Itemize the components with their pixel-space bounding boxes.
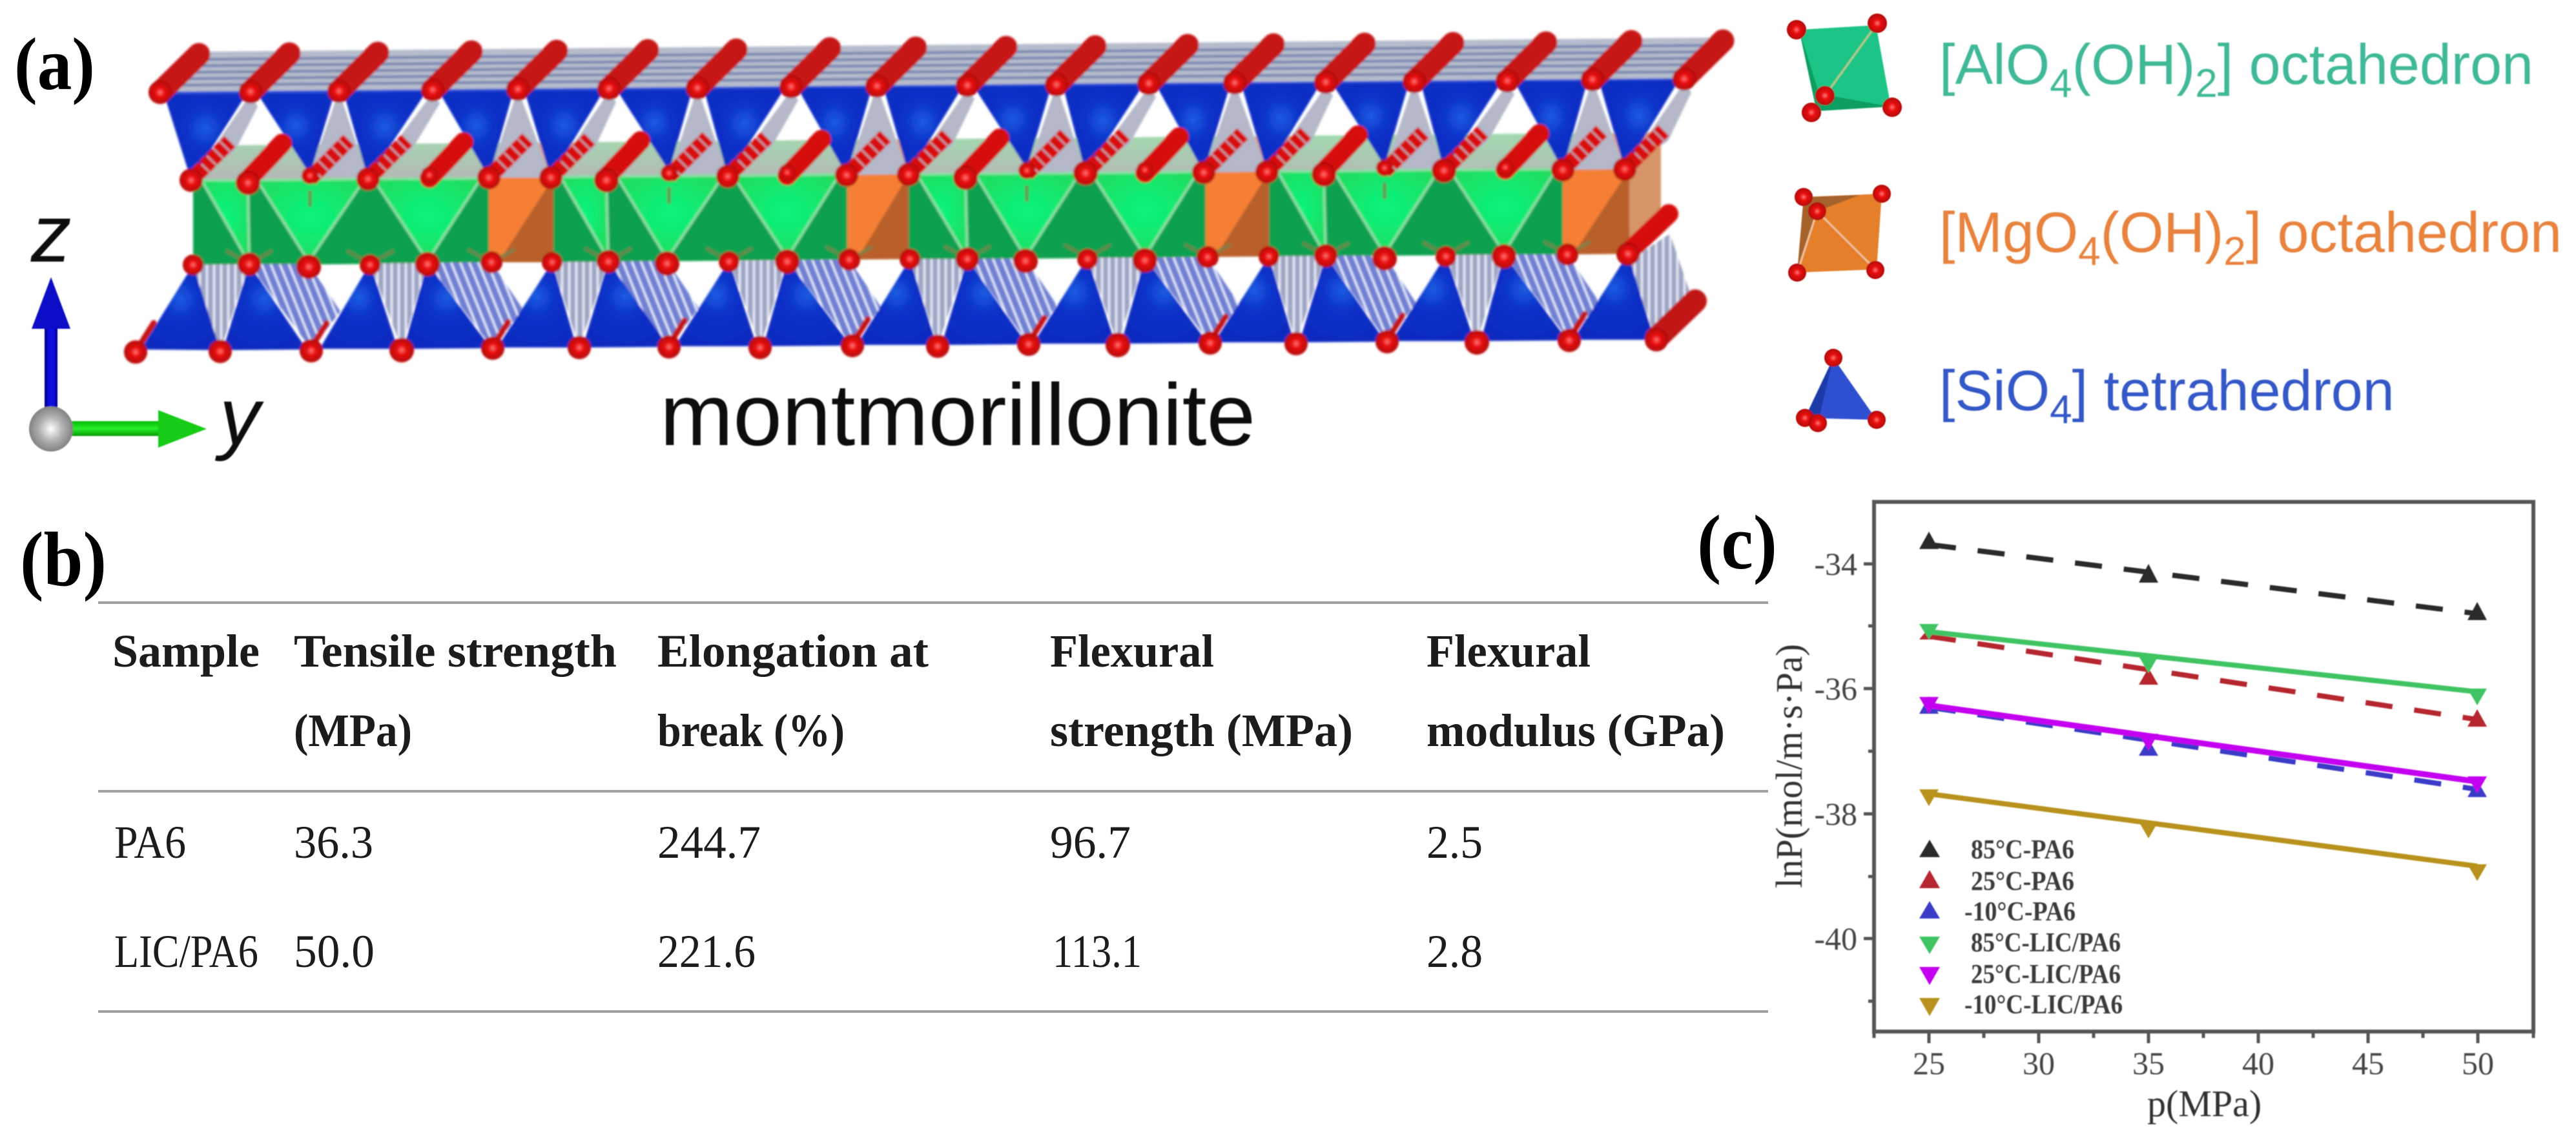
table row: LIC/PA6 [114,926,1483,977]
legend text: AlO4(OH)2 octahedron: 2 [2195,61,2218,106]
chart legend: 85°C-PA6 [1971,835,2074,865]
table row: LIC/PA6: LIC/PA6 [114,926,258,977]
legend text: MgO4(OH)2 octahedron: 2 [2223,229,2246,274]
table row: LIC/PA6: 113.1 [1053,926,1142,977]
y tick labels: -34 [1814,546,1857,582]
table header: Tensile strength [294,625,617,677]
oxygen rods, top sheet [160,41,1723,92]
table row: PA6: 244.7 [657,816,761,868]
legend text: SiO4 tetrahedron: 4 [2050,388,2072,432]
table header [112,625,1725,756]
oxygen rods, middle sheet [138,130,1695,348]
legend text: MgO4(OH)2 octahedron: (OH) [2101,200,2223,264]
y tick labels: -40 [1814,920,1857,957]
x tick labels: 40 [2242,1045,2274,1081]
plot frame and ticks [1864,502,2533,1043]
legend text: AlO4(OH)2 octahedron: ] octahedron [2218,32,2533,96]
panel a: montmorillonite crystal structure [124,37,1728,364]
chart legend: 25°C-PA6 [1971,867,2074,897]
series: 25C LIC/PA6 [1919,697,2487,793]
series: 85C LIC/PA6 [1919,624,2487,705]
legend text: AlO4(OH)2 octahedron: [AlO [1939,32,2050,96]
legend text: MgO4(OH)2 octahedron: ] octahedron [2246,200,2562,264]
y tick labels: -36 [1814,670,1857,707]
legend icon: SiO4 tetrahedron [1796,349,1886,432]
table header: strength (MPa) [1050,705,1353,756]
z axis label: z [30,189,71,279]
table header: Sample [112,625,260,677]
table header: Flexural [1427,625,1591,677]
z axis arrow [32,277,70,413]
gray tetrahedron side faces, top sheet [191,79,1691,180]
x tick labels: 45 [2352,1045,2384,1081]
series: -10C PA6 [1919,696,2487,797]
legend icon: MgO4(OH)2 octahedron [1788,185,1891,282]
legend text: AlO4(OH)2 octahedron: (OH) [2072,32,2195,96]
octahedral upper surface band [191,132,1661,180]
legend icon: AlO4(OH)2 octahedron [1787,14,1902,122]
striped tetrahedron side faces, bottom sheet [193,234,1690,350]
legend text: MgO4(OH)2 octahedron: [MgO [1939,200,2078,264]
table row: PA6: 96.7 [1050,816,1131,868]
table row: LIC/PA6: 2.8 [1427,926,1483,977]
series: 25C PA6 [1919,628,2487,727]
y axis label: y [214,372,264,462]
chart legend: -10°C-PA6 [1964,897,2076,927]
right end tan block [1629,139,1661,254]
panel c: permeability line chart [1768,502,2533,1125]
x axis title: p(MPa) [2147,1083,2262,1125]
table header: break (%) [657,705,845,756]
table row: LIC/PA6: 50.0 [294,926,375,977]
octahedral sheet dark green blocks [193,169,1563,265]
y axis title: lnP(mol/m·s·Pa) [1768,644,1810,888]
x tick labels: 30 [2023,1045,2055,1081]
y tick labels: -38 [1814,796,1857,832]
table header: Flexural [1050,625,1214,677]
table header: (MPa) [294,705,412,756]
x tick labels: 35 [2132,1045,2165,1081]
panel b label: (b) [20,516,107,602]
legend text: SiO4 tetrahedron: [SiO [1939,358,2050,422]
chart legend: 85°C-LIC/PA6 [1971,928,2121,958]
y axis arrow [70,410,207,448]
mineral name: montmorillonite [660,366,1255,464]
blue tetrahedra, top sheet [164,80,1679,180]
table row: LIC/PA6: 221.6 [657,926,756,977]
origin sphere [29,406,73,452]
legend text: MgO4(OH)2 octahedron: 4 [2078,229,2101,274]
table row: PA6: 36.3 [294,816,373,868]
series: 85C PA6 [1919,532,2487,620]
legend text: AlO4(OH)2 octahedron: 4 [2050,61,2072,106]
bond marks in octahedral sheet [226,183,1591,264]
x tick labels: 25 [1913,1045,1945,1081]
legend text: SiO4 tetrahedron: ] tetrahedron [2072,358,2395,422]
octahedral sheet bright green faces [201,169,1556,264]
panel b: mechanical properties table [98,601,1768,1013]
y tick labels [1814,546,1857,957]
legend: crystal polyhedra [1787,14,2562,432]
chart legend [1919,835,2123,1020]
magnesium orange octahedra [489,169,1629,262]
panel a label: (a) [14,23,95,105]
chart legend: 25°C-LIC/PA6 [1971,960,2121,990]
table header: modulus (GPa) [1427,705,1725,756]
panel c label: (c) [1697,499,1777,585]
table row: PA6: PA6 [114,816,186,868]
axis triad [29,189,264,462]
oxygen atoms [124,67,1696,364]
chart legend: -10°C-LIC/PA6 [1964,990,2123,1020]
table header: Elongation at [657,625,929,677]
blue tetrahedra, bottom sheet [141,254,1654,350]
table row: PA6: 2.5 [1427,816,1483,868]
table row: PA6 [114,816,1483,868]
x tick labels: 50 [2462,1045,2494,1081]
top surface band [160,37,1728,94]
x tick labels [1913,1045,2494,1081]
series: -10C LIC/PA6 [1919,789,2487,881]
